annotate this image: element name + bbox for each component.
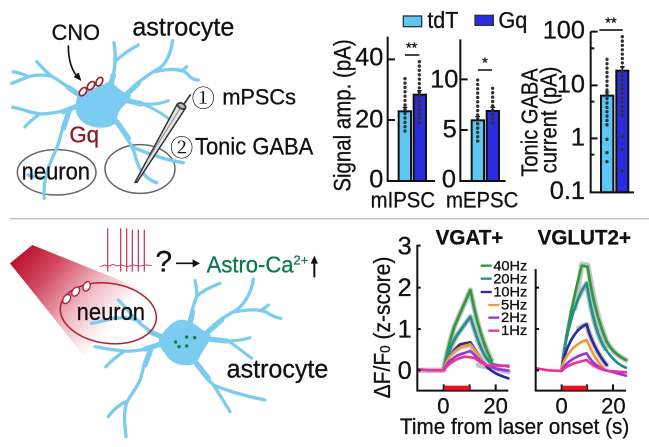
- chart: tonic GABA: **: [605, 16, 617, 32]
- label: neuron: neuron: [77, 299, 145, 326]
- legend: Gq: [498, 7, 527, 33]
- panel: fiber photometry traces: [369, 225, 631, 439]
- label: CNO: CNO: [52, 20, 100, 45]
- chart: VGAT+: [398, 225, 508, 418]
- up arrow: [311, 256, 318, 277]
- chart: VGAT+: VGAT+: [436, 225, 503, 249]
- legend: frequencies: 10Hz: [493, 283, 527, 299]
- chart: mEPSC: mEPSC: [446, 187, 518, 212]
- label: mPSCs: ①: [192, 86, 215, 113]
- calcium dots: [174, 335, 196, 348]
- astrocyte cell: [92, 279, 281, 437]
- label: astrocyte: astrocyte: [227, 353, 328, 383]
- label: mPSCs: [192, 85, 296, 113]
- arrow: CNO to receptors: [68, 45, 81, 81]
- question mark: ?: [155, 246, 172, 279]
- chart: mIPSC: 40: [355, 44, 383, 72]
- chart: VGLUT2+: 20: [601, 393, 626, 418]
- label: Astro-Ca2+: 2+: [294, 252, 309, 267]
- legend: frequencies: 20Hz: [493, 270, 527, 286]
- chart: mIPSC: Signal amp. (pA): [330, 39, 357, 192]
- neuron ellipse: [56, 277, 160, 350]
- chart: VGLUT2+: VGLUT2+: [538, 225, 631, 249]
- receptors: [78, 76, 104, 97]
- chart: tonic GABA: 0.1: [550, 177, 585, 205]
- legend: frequencies: 1Hz: [501, 322, 527, 338]
- chart: VGAT+: 20: [483, 393, 508, 418]
- neuron ellipse left: [17, 150, 96, 195]
- chart: VGLUT2+: 0: [556, 393, 568, 418]
- chart: mEPSC: [430, 39, 518, 212]
- chart: mEPSC: *: [482, 56, 488, 72]
- panel: bar charts: [330, 7, 634, 212]
- chart: VGAT+: 0: [398, 357, 412, 385]
- label: astrocyte: astrocyte: [132, 12, 234, 42]
- legend: [403, 7, 527, 33]
- chart: mIPSC: **: [406, 41, 418, 57]
- chart: mEPSC: 0: [442, 165, 456, 193]
- chart: tonic GABA: Tonic GABA: [516, 68, 542, 177]
- chart: tonic GABA: 1: [571, 123, 585, 151]
- legend: frequencies: 5Hz: [501, 296, 527, 312]
- chart: tonic GABA: 10: [557, 70, 585, 98]
- chart: VGAT+: 1: [398, 316, 412, 344]
- chart: tonic GABA: current (pA): [536, 67, 562, 173]
- label: neuron: neuron: [22, 158, 90, 185]
- opsin receptors: [61, 280, 92, 305]
- neuron ellipse right: [105, 145, 175, 193]
- divider: [10, 218, 649, 219]
- label: mPSCs: mPSCs: [222, 85, 296, 110]
- x axis label: Time from laser onset (s): [400, 414, 629, 439]
- recording pipette: [135, 94, 191, 182]
- label: Tonic GABA: Tonic GABA: [195, 134, 313, 161]
- panel: astrocyte patch-clamp schematic: [12, 12, 313, 198]
- astrocyte cell: [12, 41, 198, 198]
- legend: frequencies: 40Hz: [493, 257, 527, 273]
- spike train: [100, 228, 152, 272]
- legend: frequencies: 2Hz: [501, 309, 527, 325]
- chart: mEPSC: 5: [443, 115, 457, 143]
- chart: mEPSC: 10: [430, 65, 458, 93]
- light beam: [10, 245, 160, 355]
- chart: tonic GABA: [516, 16, 634, 205]
- y axis label: ΔF/F0 (z-score): [369, 257, 395, 398]
- panel: optogenetic stimulation schematic: [10, 228, 328, 437]
- chart: VGAT+: 3: [398, 232, 412, 260]
- chart: tonic GABA: 100: [543, 16, 585, 44]
- chart: mIPSC: mIPSC: [371, 187, 435, 212]
- arrow: [176, 259, 200, 267]
- label: Tonic GABA: ②: [170, 135, 193, 162]
- label: Gq: Gq: [69, 122, 99, 148]
- chart: VGAT+: 2: [398, 274, 412, 302]
- chart: mIPSC: [330, 37, 435, 212]
- chart: VGAT+: 0: [437, 393, 449, 418]
- legend: frequencies: [481, 257, 527, 338]
- chart: mIPSC: 20: [355, 106, 383, 134]
- chart: mIPSC: 0: [369, 165, 383, 193]
- legend: tdT: [427, 7, 458, 33]
- chart: VGLUT2+: [536, 225, 631, 418]
- label: Astro-Ca2+: Astro-Ca: [207, 251, 296, 277]
